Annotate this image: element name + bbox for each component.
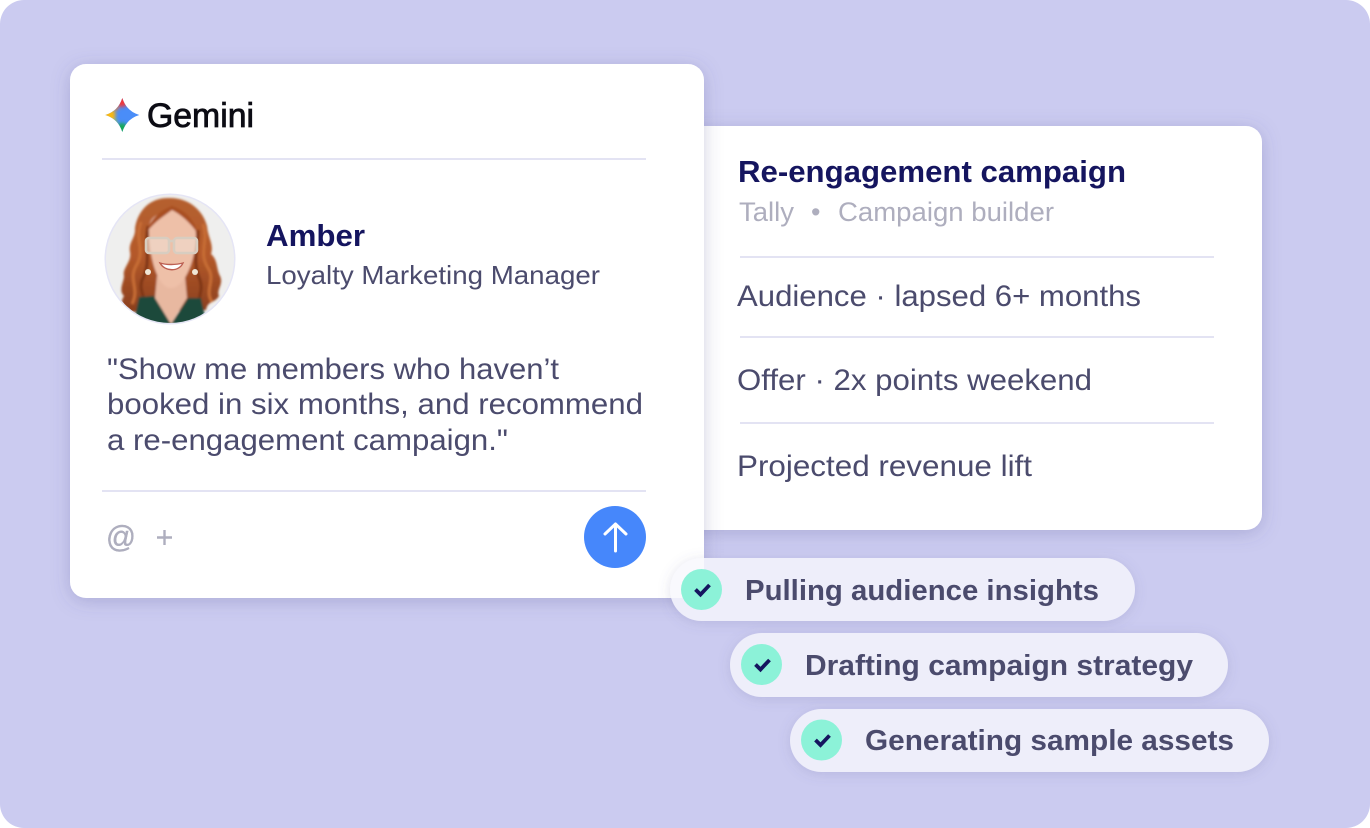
prompt quote: "Show me members who haven’t xyxy=(107,353,560,386)
prompt quote: booked in six months, and recommend xyxy=(107,388,643,421)
status pill: campaign strategy xyxy=(730,633,1228,697)
icon: at sign: @ xyxy=(106,519,136,554)
role: Loyalty Marketing Manager xyxy=(266,260,600,290)
status pill: sample assets xyxy=(790,709,1269,772)
icon: check xyxy=(681,569,722,610)
campaign subtitle: • xyxy=(811,197,820,227)
icon: check xyxy=(741,644,782,685)
status pill: sample assets: Generating sample assets xyxy=(865,725,1234,757)
row: audience: Audience · lapsed 6+ months xyxy=(737,280,1141,313)
icon: Gemini star xyxy=(106,98,140,132)
campaign subtitle: Tally xyxy=(739,197,795,227)
forehead hair parting xyxy=(147,206,197,230)
panel: prompt card xyxy=(70,64,704,598)
status pill: audience insights xyxy=(670,558,1135,621)
smile xyxy=(160,263,183,270)
status pill: campaign strategy: Drafting campaign strategy xyxy=(805,650,1193,682)
hair mass xyxy=(121,198,221,312)
panel: campaign card xyxy=(680,126,1262,530)
prompt quote xyxy=(107,353,643,457)
neck xyxy=(155,276,187,324)
row: projected revenue: Projected revenue lift xyxy=(737,450,1033,483)
name: Amber xyxy=(266,218,365,253)
icon: check xyxy=(801,720,842,760)
avatar: Amber portrait xyxy=(104,194,236,324)
glasses xyxy=(146,238,197,253)
Gemini wordmark: Gemini xyxy=(147,97,254,135)
face xyxy=(149,209,196,288)
status pill: audience insights: Pulling audience insights xyxy=(745,575,1099,607)
prompt quote: a re-engagement campaign." xyxy=(107,424,508,457)
row: offer: Offer · 2x points weekend xyxy=(737,364,1092,397)
earrings xyxy=(145,269,151,275)
shirt xyxy=(134,295,206,323)
send button with up arrow xyxy=(584,506,646,568)
hair strands xyxy=(132,222,212,310)
icon: plus xyxy=(157,530,172,545)
campaign heading: Re-engagement campaign xyxy=(738,154,1126,189)
campaign subtitle: Campaign builder xyxy=(838,197,1054,227)
